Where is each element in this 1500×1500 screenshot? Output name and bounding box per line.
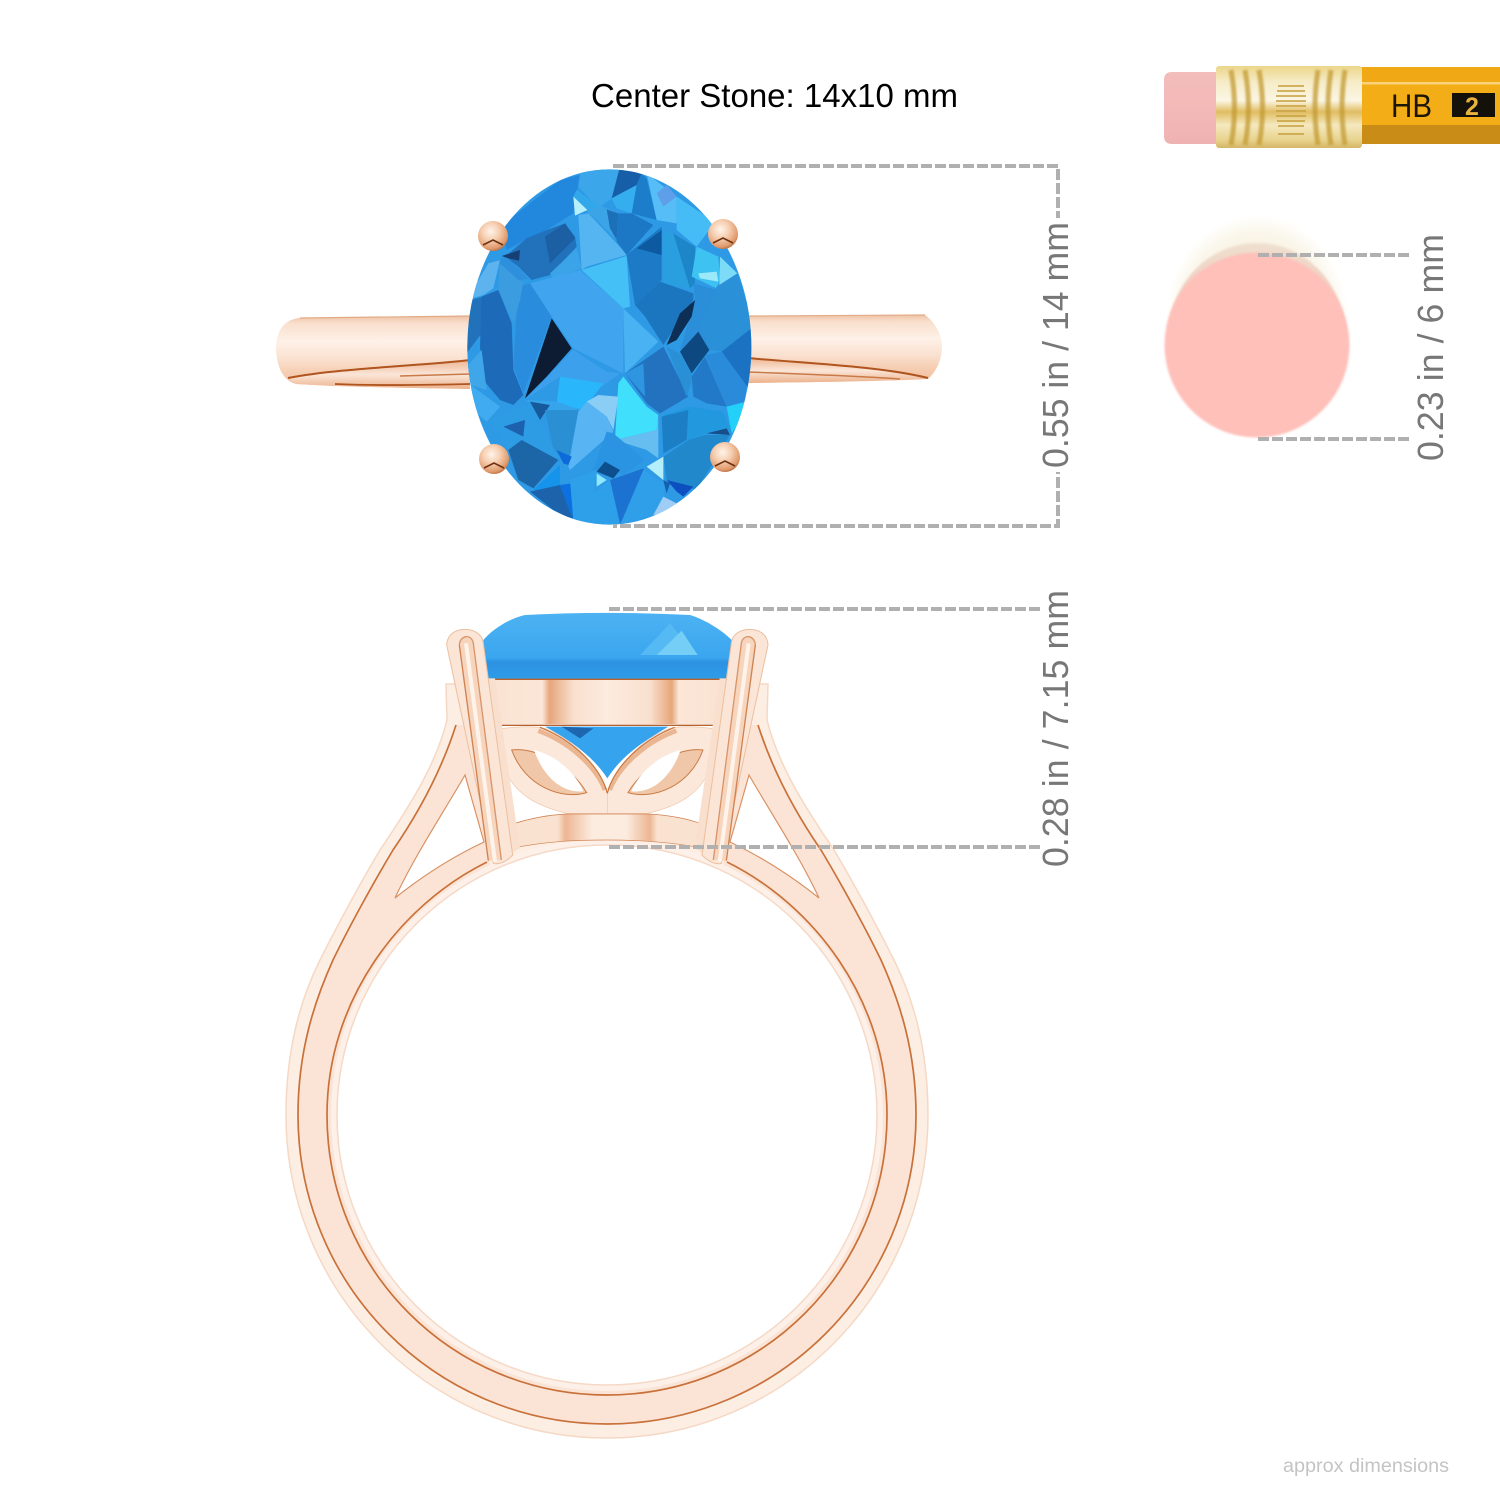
prong: top right bbox=[708, 219, 738, 249]
pencil grade text HB: HB bbox=[1391, 88, 1432, 124]
eraser halo bbox=[1169, 218, 1345, 418]
prong: bottom right bbox=[710, 442, 740, 472]
inner opening bbox=[337, 845, 877, 1385]
stone: pavilion bbox=[545, 727, 668, 778]
side height: bottom line bbox=[609, 845, 1040, 849]
eraser shadow crescent bbox=[1168, 243, 1346, 433]
groove lines bbox=[298, 725, 916, 1424]
stone facet highlight bbox=[640, 623, 697, 655]
white behind head bbox=[487, 680, 727, 847]
right band bbox=[748, 315, 942, 383]
label: eraser diameter: 0.23 in / 6 mm bbox=[1411, 234, 1451, 461]
stone facet highlight inner bbox=[657, 631, 698, 655]
inner strip bbox=[331, 839, 883, 1391]
side view ring bbox=[286, 613, 928, 1438]
pencil ferrule bbox=[1216, 66, 1362, 148]
top view ring bbox=[276, 315, 942, 389]
left band bbox=[276, 316, 470, 389]
eraser face bbox=[1164, 252, 1350, 438]
gem prongs bbox=[478, 219, 740, 474]
leaf: left bbox=[493, 727, 607, 813]
eraser: top line bbox=[1258, 253, 1410, 257]
pencil bbox=[1164, 66, 1500, 148]
band edges bbox=[487, 679, 727, 725]
shoulder gap: left bbox=[395, 775, 484, 898]
stone: crown side view bbox=[483, 613, 732, 679]
pavilion facet bbox=[562, 727, 593, 738]
gallery top band bbox=[487, 679, 727, 724]
prong: side left bbox=[447, 629, 520, 864]
height bracket bbox=[613, 166, 1058, 526]
gallery lower band bbox=[512, 814, 703, 848]
side height: top line bbox=[609, 607, 1040, 611]
prong: top left bbox=[478, 221, 508, 251]
head (gallery and stone) bbox=[447, 613, 768, 864]
dimension lines bbox=[609, 166, 1410, 847]
label background: stone height bbox=[1040, 218, 1072, 472]
gem: oval swiss blue topaz, top view bbox=[467, 167, 753, 527]
prong: bottom left bbox=[479, 444, 509, 474]
title: Center Stone: 14x10 mm bbox=[591, 77, 958, 114]
leaf: right bbox=[607, 727, 721, 813]
prong: side right bbox=[695, 629, 768, 864]
label: side height: 0.28 in / 7.15 mm bbox=[1036, 590, 1076, 867]
pencil grade box bbox=[1452, 93, 1495, 121]
label: stone height: 0.55 in / 14 mm bbox=[1036, 222, 1076, 468]
pencil body bbox=[1360, 67, 1500, 144]
shoulder gap: right bbox=[730, 775, 819, 898]
eraser end view bbox=[1164, 218, 1350, 438]
eraser: bottom line bbox=[1258, 437, 1410, 441]
footnote: approx dimensions bbox=[1283, 1455, 1449, 1477]
pencil eraser bbox=[1164, 72, 1218, 144]
shank and shoulders bbox=[286, 684, 928, 1438]
pencil grade box: 2 bbox=[1465, 93, 1479, 121]
